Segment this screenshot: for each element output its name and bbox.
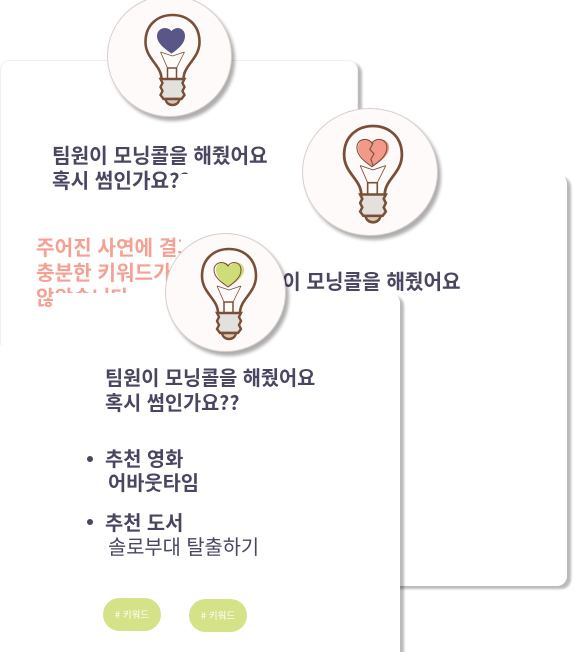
front card lower body <box>0 345 400 652</box>
middle card bulb badge <box>302 108 438 236</box>
keyword tag two <box>189 599 247 632</box>
back card question heading: 혹시 썸인가요?? <box>52 165 190 194</box>
front card question heading: 혹시 썸인가요?? <box>105 386 239 416</box>
panel: back card <box>0 60 358 360</box>
keyword tag one: # 키워드 <box>115 607 149 621</box>
front card question heading <box>105 362 315 416</box>
front card question heading: 팀원이 모닝콜을 해줬어요 <box>105 362 315 391</box>
back card error message <box>36 232 276 311</box>
keyword tag two: # 키워드 <box>201 608 235 622</box>
icon: green heart light bulb <box>200 248 258 340</box>
back card error message: 주어진 사연에 결과를 내기에 <box>36 232 276 261</box>
movie title: 어바웃타임 <box>108 467 199 496</box>
book label: 추천 도서 <box>105 507 183 536</box>
book title: 솔로부대 탈출하기 <box>108 531 259 560</box>
keyword tag one <box>103 598 161 631</box>
front card bulb badge <box>165 233 286 352</box>
icon: broken pink heart light bulb <box>342 124 404 224</box>
movie label: 추천 영화 <box>105 443 183 472</box>
middle card question heading: 팀원이 모닝콜을 해줬어요 <box>245 266 461 295</box>
back card question heading: 팀원이 모닝콜을 해줬어요 <box>52 140 268 169</box>
panel: middle card <box>181 174 567 586</box>
back card question heading <box>52 140 268 194</box>
icon: navy heart light bulb <box>144 14 201 106</box>
bullet dot <box>87 456 93 462</box>
bullet: recommended movie <box>87 443 199 496</box>
back card error message: 충분한 키워드가 포함되지 <box>36 257 252 286</box>
bullet dot <box>87 519 93 525</box>
bullet: recommended book <box>87 507 259 560</box>
front card upper body <box>53 293 400 652</box>
back card bulb badge <box>107 0 232 117</box>
back card error message: 않았습니다 <box>36 282 129 311</box>
